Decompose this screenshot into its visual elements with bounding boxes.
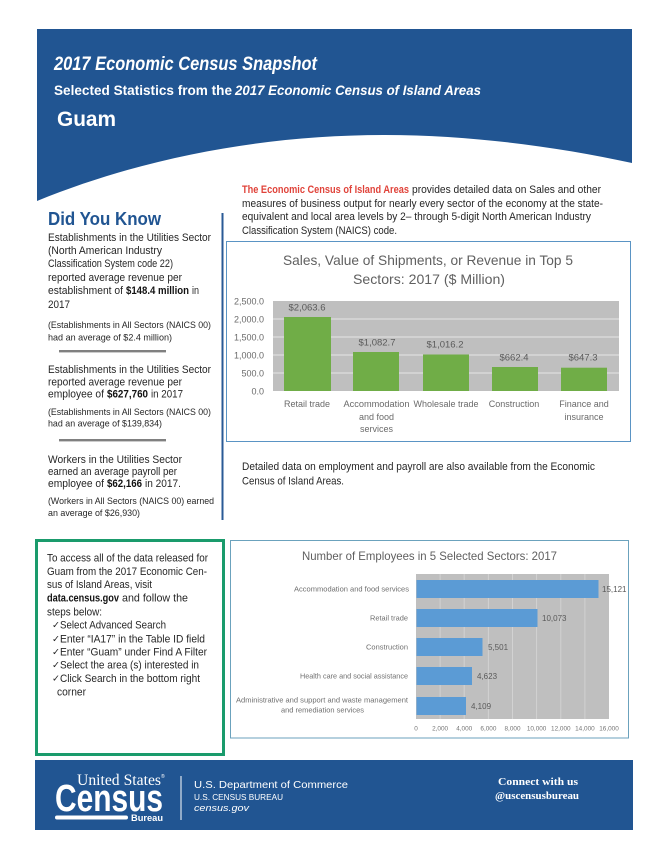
checklist: Enter “Guam” under Find A Filter xyxy=(60,646,207,658)
category labels: Administrative and support and waste management xyxy=(236,696,408,704)
connect with us: Connect with us xyxy=(498,776,579,788)
category labels: Construction xyxy=(366,642,408,652)
category labels: Retail trade xyxy=(284,399,330,409)
chart title xyxy=(283,252,573,287)
x axis labels: 14,000 xyxy=(575,726,595,732)
x axis labels: 0 xyxy=(414,726,418,732)
fact: revenue per employee: employee of xyxy=(48,388,104,400)
fact: revenue per employee xyxy=(48,364,211,428)
value labels: $647.3 xyxy=(568,352,598,364)
fact: revenue per establishment: 2017 xyxy=(48,299,70,311)
x axis labels: 12,000 xyxy=(551,726,571,732)
fact: payroll per employee: Workers in the Utilities Sector xyxy=(48,454,182,466)
checklist: ✓ xyxy=(52,634,60,645)
y axis labels: 2,500.0 xyxy=(234,296,264,306)
title: 2017 Economic Census Snapshot xyxy=(53,54,318,75)
employment text: Census of Island Areas. xyxy=(242,476,344,488)
heading: Did You Know xyxy=(48,208,162,229)
category labels: and remediation services xyxy=(281,706,364,714)
value labels: $1,016.2 xyxy=(427,340,463,350)
category labels: Finance and xyxy=(559,399,609,409)
area name: Guam xyxy=(57,107,116,131)
value labels: 15,121 xyxy=(602,585,627,594)
connect with us: @uscensusbureau xyxy=(495,791,579,802)
checklist xyxy=(52,620,207,698)
value labels: 10,073 xyxy=(542,614,567,623)
category labels: Retail trade xyxy=(370,614,408,622)
department text xyxy=(194,779,348,814)
intro text: Classification System (NAICS) code. xyxy=(242,225,397,237)
value labels: $2,063.6 xyxy=(289,302,325,314)
category labels: Construction xyxy=(489,399,539,409)
fact: revenue per establishment: had an average of $2.4 million) xyxy=(48,332,172,342)
subtitle: Selected Statistics from the xyxy=(54,82,232,98)
access instructions: data.census.gov xyxy=(47,592,119,604)
census bureau logo: Bureau xyxy=(131,813,163,823)
checklist: ✓ xyxy=(52,620,60,631)
department text: U.S. Department of Commerce xyxy=(194,779,348,791)
fact: revenue per establishment: (North American Industry xyxy=(48,245,163,257)
census bureau logo xyxy=(55,772,165,823)
y axis labels: 1,000.0 xyxy=(234,350,264,360)
census bureau logo: ® xyxy=(161,773,165,780)
bar chart: sales by sector xyxy=(226,242,630,442)
chart title: Sectors: 2017 ($ Million) xyxy=(353,271,505,287)
fact: payroll per employee xyxy=(48,454,214,518)
value labels: 4,109 xyxy=(471,702,492,711)
access instructions: sus of Island Areas, visit xyxy=(47,579,152,591)
subtitle: 2017 Economic Census of Island Areas xyxy=(234,82,481,98)
y axis labels: 2,000.0 xyxy=(234,314,264,324)
fact: revenue per establishment: establishment of xyxy=(48,285,123,297)
chart title: Sales, Value of Shipments, or Revenue in Top 5 xyxy=(283,252,573,268)
fact: revenue per establishment: in xyxy=(192,285,199,297)
checklist: ✓ xyxy=(52,647,60,658)
x axis labels: 10,000 xyxy=(527,726,547,732)
employment text xyxy=(242,461,596,488)
banner shape with curved bottom xyxy=(37,29,632,201)
fact: revenue per establishment: (Establishments in All Sectors (NAICS 00) xyxy=(48,320,211,330)
access instructions xyxy=(47,552,208,618)
checklist: Enter “IA17” in the Table ID field xyxy=(60,634,205,646)
category labels: Accommodation xyxy=(344,399,410,409)
access instructions: To access all of the data released for xyxy=(47,552,208,564)
category labels: Wholesale trade xyxy=(414,399,478,409)
checklist: corner xyxy=(57,686,86,698)
fact: payroll per employee: an average of $26,930) xyxy=(48,508,140,518)
intro text: The Economic Census of Island Areas xyxy=(242,184,409,196)
category labels: Health care and social assistance xyxy=(300,672,408,680)
panel: how to access data xyxy=(36,540,224,754)
plot area xyxy=(273,301,619,391)
value labels: 4,623 xyxy=(477,672,498,681)
connect with us xyxy=(495,776,579,802)
department text: U.S. CENSUS BUREAU xyxy=(194,793,283,802)
value labels: $1,082.7 xyxy=(359,338,395,348)
fact: revenue per establishment: reported average revenue per xyxy=(48,272,182,284)
fact: revenue per employee: (Establishments in All Sectors (NAICS 00) xyxy=(48,407,211,417)
access instructions: steps below: xyxy=(47,606,102,618)
intro text: provides detailed data on Sales and other xyxy=(412,184,601,196)
value labels: 5,501 xyxy=(488,643,509,652)
x axis labels: 8,000 xyxy=(504,726,521,732)
y axis labels: 1,500.0 xyxy=(234,332,264,342)
plot area xyxy=(416,574,609,719)
value labels xyxy=(471,585,627,711)
fact: revenue per establishment: Classification System code 22) xyxy=(48,258,173,270)
panel: did you know xyxy=(48,208,214,518)
intro text xyxy=(242,184,603,237)
checklist: Click Search in the bottom right xyxy=(60,673,200,685)
category labels xyxy=(236,584,409,714)
intro text: equivalent and local area levels by 2– through 5-digit North American Industry xyxy=(242,211,592,223)
fact: payroll per employee: employee of xyxy=(48,478,104,490)
header banner xyxy=(37,29,632,201)
y axis labels: 0.0 xyxy=(251,386,264,396)
access instructions: Guam from the 2017 Economic Cen- xyxy=(47,566,207,578)
x axis labels: 2,000 xyxy=(432,726,449,732)
chart title: Number of Employees in 5 Selected Sectors: 2017 xyxy=(302,549,557,563)
census bureau logo: Census xyxy=(55,778,163,820)
checklist: Select Advanced Search xyxy=(60,620,166,632)
fact: revenue per establishment: Establishments in the Utilities Sector xyxy=(48,232,211,244)
fact: revenue per establishment: $148.4 million xyxy=(126,285,189,297)
footer xyxy=(35,760,633,830)
bars xyxy=(416,580,598,715)
department text: census.gov xyxy=(194,803,250,814)
category labels: services xyxy=(360,424,393,434)
intro text: measures of business output for nearly every sector of the economy at the state- xyxy=(242,198,603,210)
x axis labels: 6,000 xyxy=(480,726,497,732)
value labels: $662.4 xyxy=(499,352,529,364)
fact: revenue per employee: $627,760 xyxy=(107,388,148,400)
x axis labels: 16,000 xyxy=(599,726,619,732)
checklist: Select the area (s) interested in xyxy=(60,660,199,672)
fact: revenue per establishment xyxy=(48,232,211,342)
value labels xyxy=(289,302,598,364)
bars xyxy=(284,317,607,391)
fact: payroll per employee: (Workers in All Sectors (NAICS 00) earned xyxy=(48,496,214,506)
fact: revenue per employee: had an average of $139,834) xyxy=(48,418,162,428)
fact: revenue per employee: reported average revenue per xyxy=(48,376,182,388)
access instructions: and follow the xyxy=(122,592,188,604)
category labels: insurance xyxy=(564,412,604,422)
fact: payroll per employee: earned an average payroll per xyxy=(48,466,177,478)
bar chart: employees by sector xyxy=(230,540,628,738)
checklist: ✓ xyxy=(52,674,60,684)
category labels: Accommodation and food services xyxy=(294,584,409,594)
fact: revenue per employee: in 2017 xyxy=(151,388,183,400)
fact: payroll per employee: in 2017. xyxy=(145,478,181,490)
fact: payroll per employee: $62,166 xyxy=(107,478,142,490)
checklist: ✓ xyxy=(52,660,60,671)
y axis labels xyxy=(234,296,264,396)
y axis labels: 500.0 xyxy=(241,368,264,378)
category labels xyxy=(284,399,609,434)
employment text: Detailed data on employment and payroll are also available from the Economic xyxy=(242,461,596,473)
category labels: and food xyxy=(359,412,394,422)
fact: revenue per employee: Establishments in the Utilities Sector xyxy=(48,364,211,376)
x axis labels: 4,000 xyxy=(456,726,473,732)
subtitle xyxy=(54,82,481,98)
x axis labels xyxy=(414,726,619,732)
census bureau logo: United States xyxy=(77,772,161,789)
